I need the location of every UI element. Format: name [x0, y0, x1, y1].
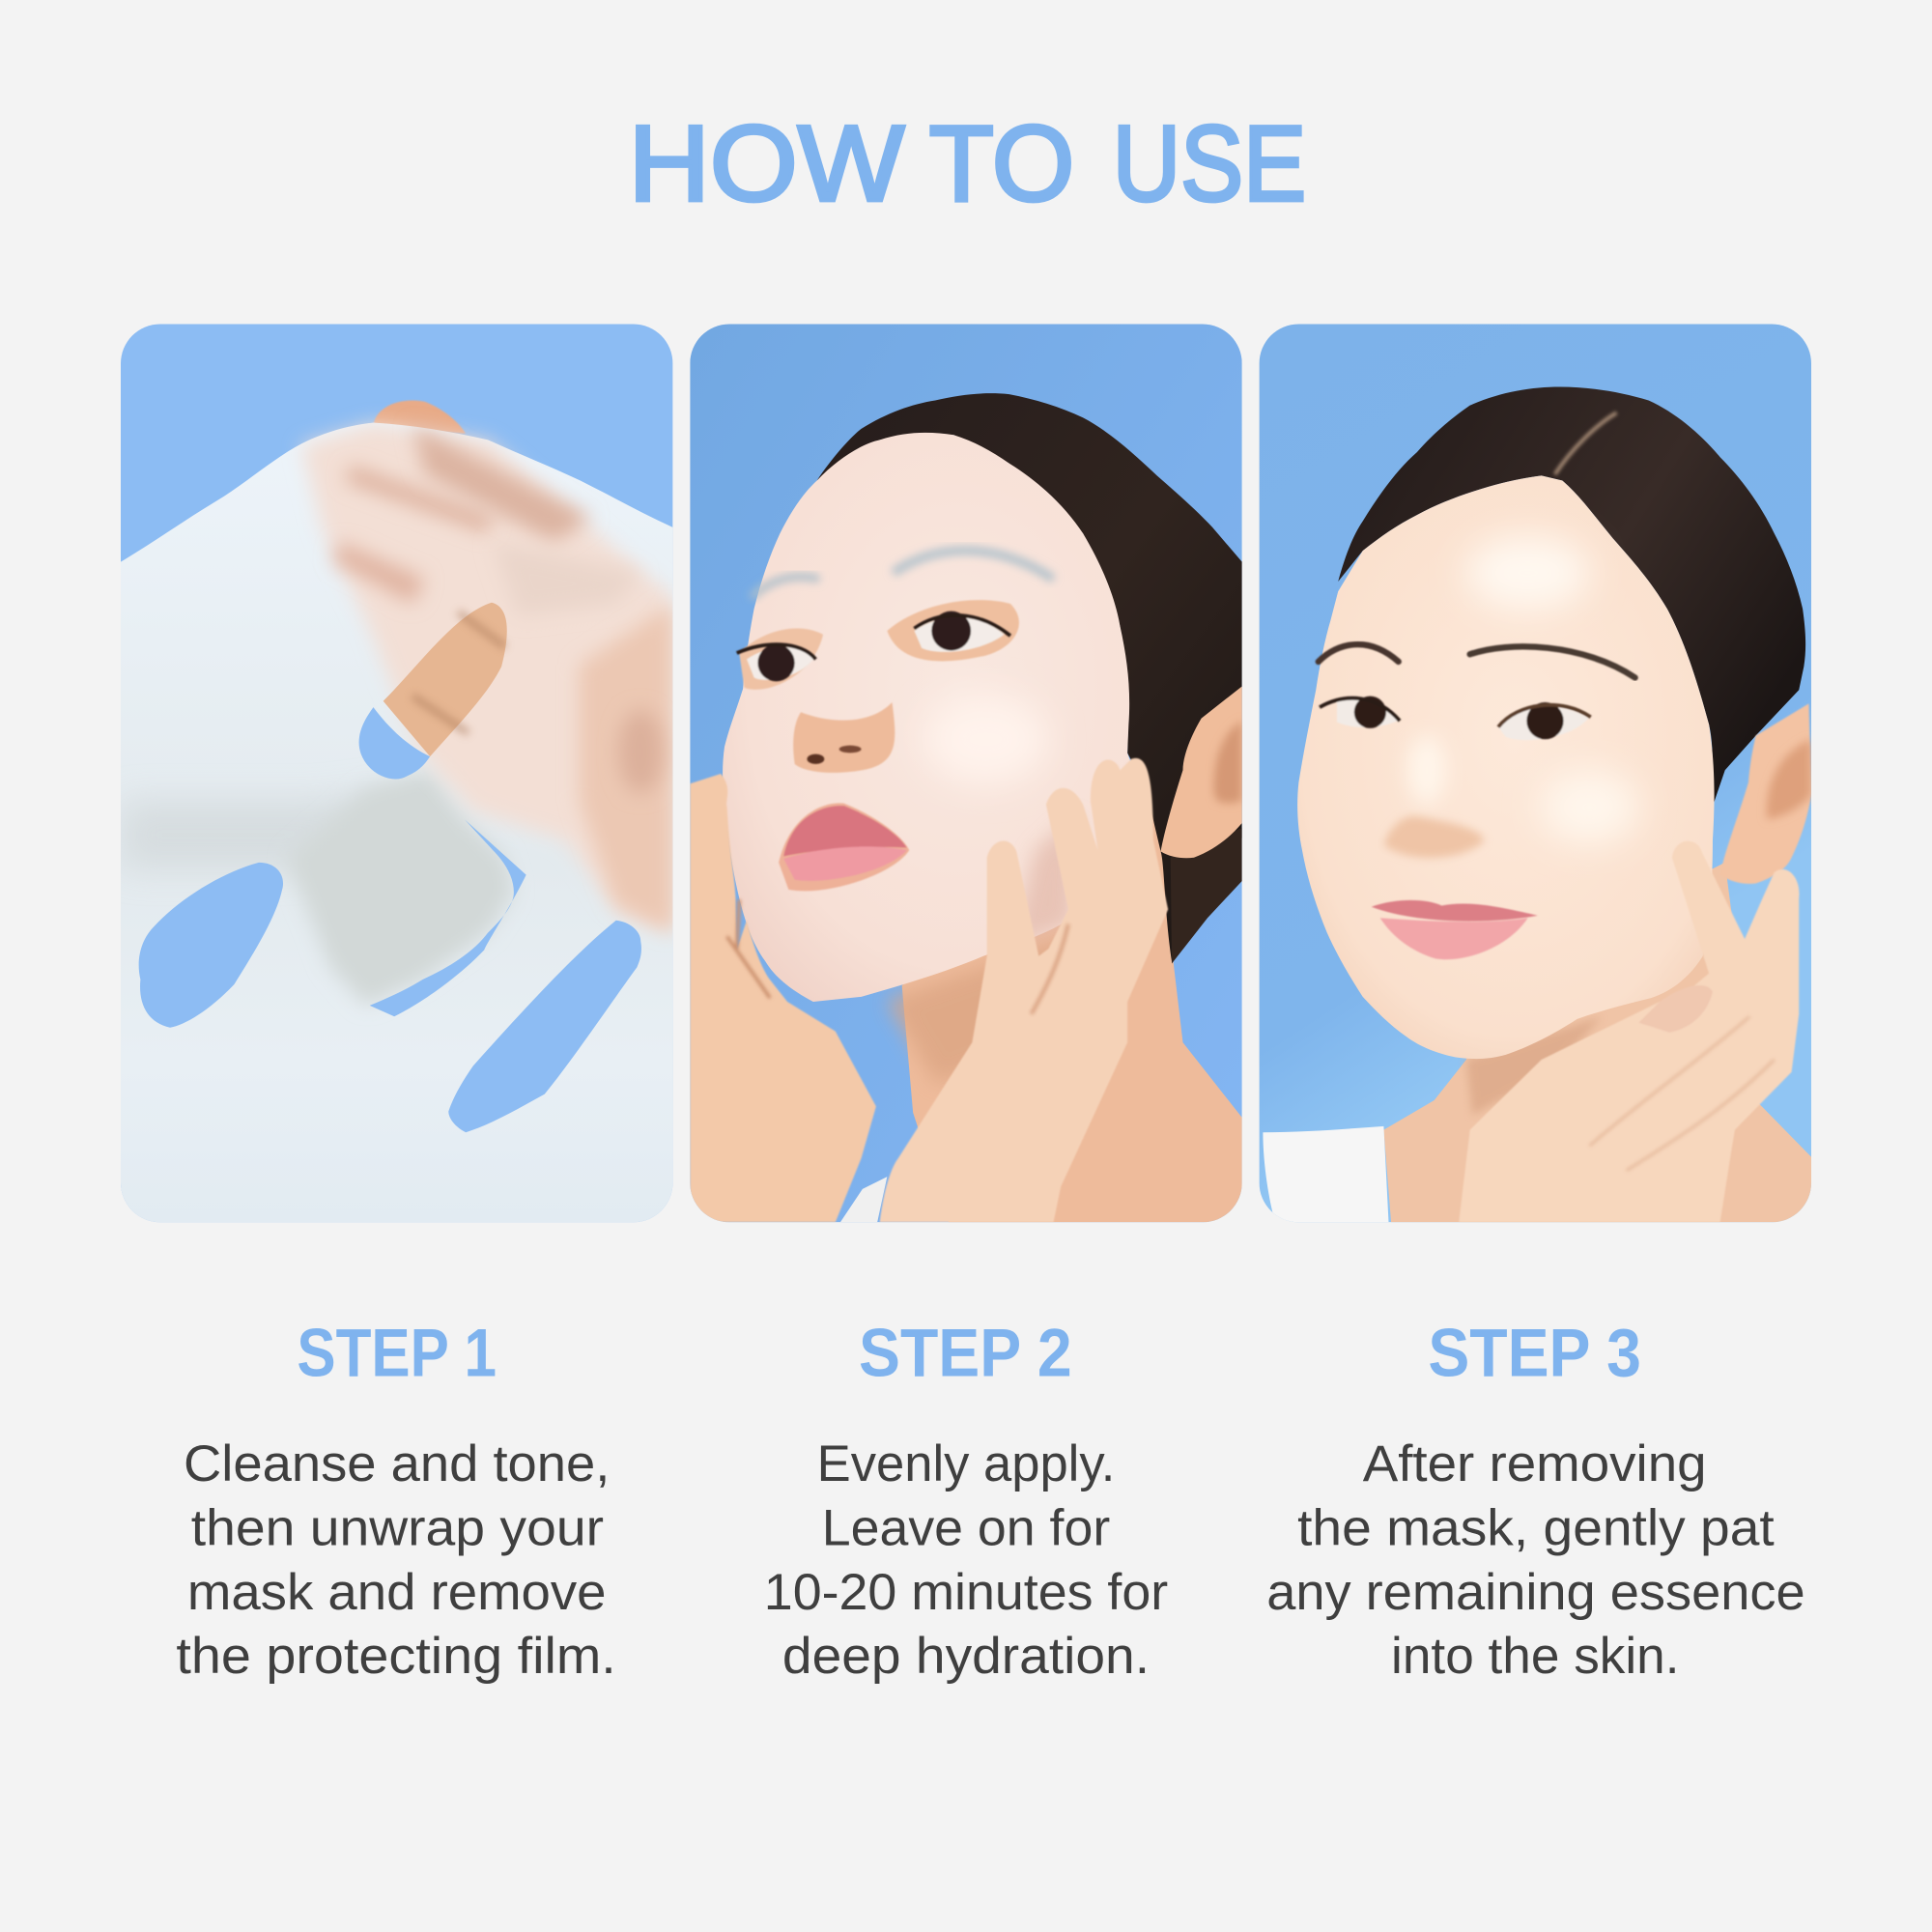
face: [1297, 475, 1715, 1059]
neck and chest: [1383, 863, 1812, 1222]
right eye: [914, 611, 1010, 652]
step 1 description: [176, 1435, 616, 1685]
left hand creases: [727, 899, 770, 998]
right hand: [880, 758, 1168, 1222]
left eye area: [739, 629, 823, 690]
step 2 heading: STEP 2: [859, 1315, 1072, 1391]
step 3 description: any remaining essence: [1266, 1564, 1805, 1621]
right eye: [1498, 702, 1591, 740]
step 1 description: mask and remove: [187, 1564, 607, 1621]
step 2 description: deep hydration.: [782, 1628, 1150, 1685]
white garment edge: [840, 1177, 887, 1222]
brows: [1319, 644, 1635, 678]
sheet mask: [121, 423, 672, 1222]
step 3 description: [1266, 1435, 1805, 1685]
upper eye hole: [359, 707, 430, 779]
step 3 heading: STEP 3: [1428, 1315, 1641, 1391]
step 2 description: [764, 1435, 1168, 1685]
nose: [793, 702, 895, 773]
title: USE: [1113, 103, 1306, 223]
left hand: [690, 774, 876, 1222]
lips: [779, 803, 909, 891]
title: TO: [929, 103, 1074, 223]
ear: [1161, 686, 1242, 858]
panel: step 3 photo: [1260, 324, 1812, 1222]
hair bun: [1171, 828, 1242, 963]
ear: [1720, 703, 1811, 884]
step 3 description: the mask, gently pat: [1297, 1499, 1775, 1556]
step 3 description: into the skin.: [1391, 1628, 1680, 1685]
lips: [1372, 900, 1538, 959]
step 3 description: After removing: [1363, 1435, 1707, 1492]
hair: [817, 393, 1242, 961]
step 1 description: Cleanse and tone,: [184, 1435, 610, 1492]
panel: step 1 photo: [121, 324, 672, 1222]
hand: [1459, 841, 1800, 1222]
nose hole: [370, 819, 526, 1016]
brow residue: [752, 577, 819, 598]
left eye: [737, 644, 815, 681]
hand seen through the sheet: [301, 424, 672, 933]
step 1 description: then unwrap your: [191, 1499, 604, 1556]
hair parting: [1555, 412, 1616, 474]
right eye area: [887, 600, 1019, 661]
left eye: [1320, 696, 1400, 728]
title: HOW: [629, 103, 905, 223]
nose: [1383, 816, 1485, 858]
hair: [1338, 387, 1805, 828]
panel: step 2 photo: [690, 324, 1242, 1222]
neck: [902, 788, 1242, 1222]
mouth hole: [448, 921, 641, 1132]
masked face: [723, 433, 1149, 1002]
lower eye hole: [139, 863, 283, 1028]
fold shading: [123, 799, 338, 867]
step 1 heading: STEP 1: [297, 1315, 497, 1391]
white top: [1263, 1126, 1389, 1222]
fingertip behind the sheet: [373, 401, 466, 434]
step 2 description: 10-20 minutes for: [764, 1564, 1168, 1621]
nose slit showing fingers: [384, 603, 507, 756]
step 2 description: Leave on for: [822, 1499, 1110, 1556]
step 1 description: the protecting film.: [176, 1628, 616, 1685]
step 2 description: Evenly apply.: [817, 1435, 1115, 1492]
title: [629, 103, 1306, 223]
